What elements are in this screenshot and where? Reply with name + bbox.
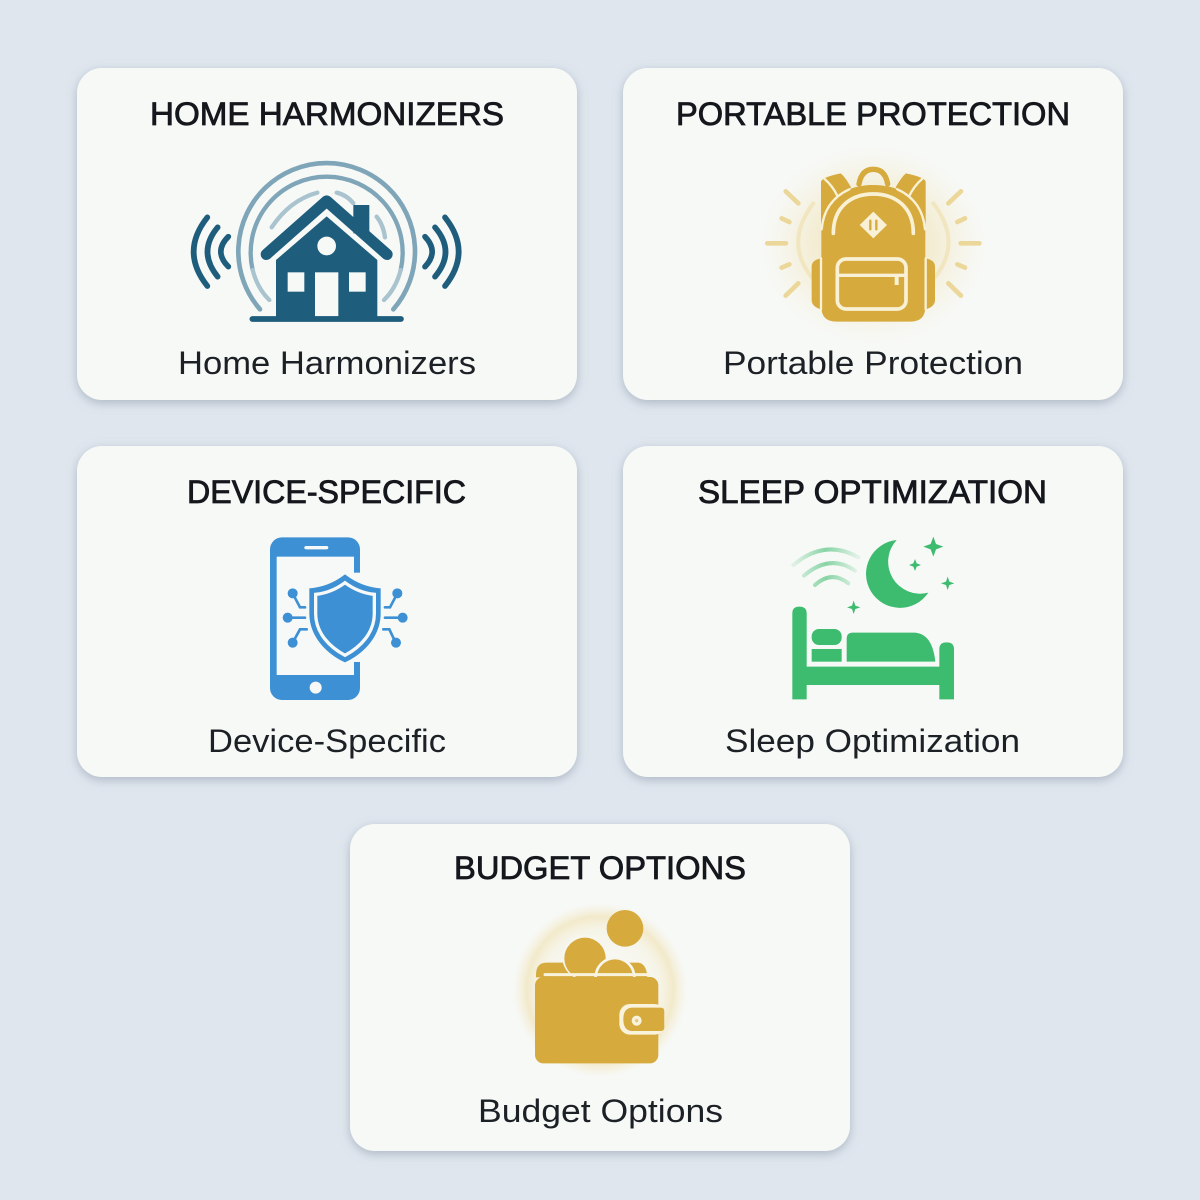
label: sleep optimization: Sleep Optimization xyxy=(725,723,1020,759)
label: portable protection: Portable Protection xyxy=(723,345,1023,381)
panel: portable protection xyxy=(623,68,1123,400)
heading: portable protection: PORTABLE PROTECTION xyxy=(676,96,1070,132)
panel: sleep optimization xyxy=(623,446,1123,777)
icon: phone with shield xyxy=(270,537,408,700)
label: home harmonizers: Home Harmonizers xyxy=(178,345,476,381)
heading: budget options: BUDGET OPTIONS xyxy=(454,850,746,886)
icon: wallet with coins xyxy=(513,903,687,1077)
heading: home harmonizers: HOME HARMONIZERS xyxy=(150,96,504,132)
icon: bed with moon and stars xyxy=(792,537,954,699)
panel: budget options xyxy=(350,824,850,1151)
label: budget options: Budget Options xyxy=(478,1093,723,1129)
panel: device-specific xyxy=(77,446,577,777)
label: device-specific: Device-Specific xyxy=(208,723,446,759)
icon: backpack with rays xyxy=(760,145,987,345)
icon: house with signal waves xyxy=(194,163,459,319)
heading: sleep optimization: SLEEP OPTIMIZATION xyxy=(698,474,1047,510)
heading: device-specific: DEVICE-SPECIFIC xyxy=(187,474,466,510)
panel: home harmonizers xyxy=(77,68,577,400)
